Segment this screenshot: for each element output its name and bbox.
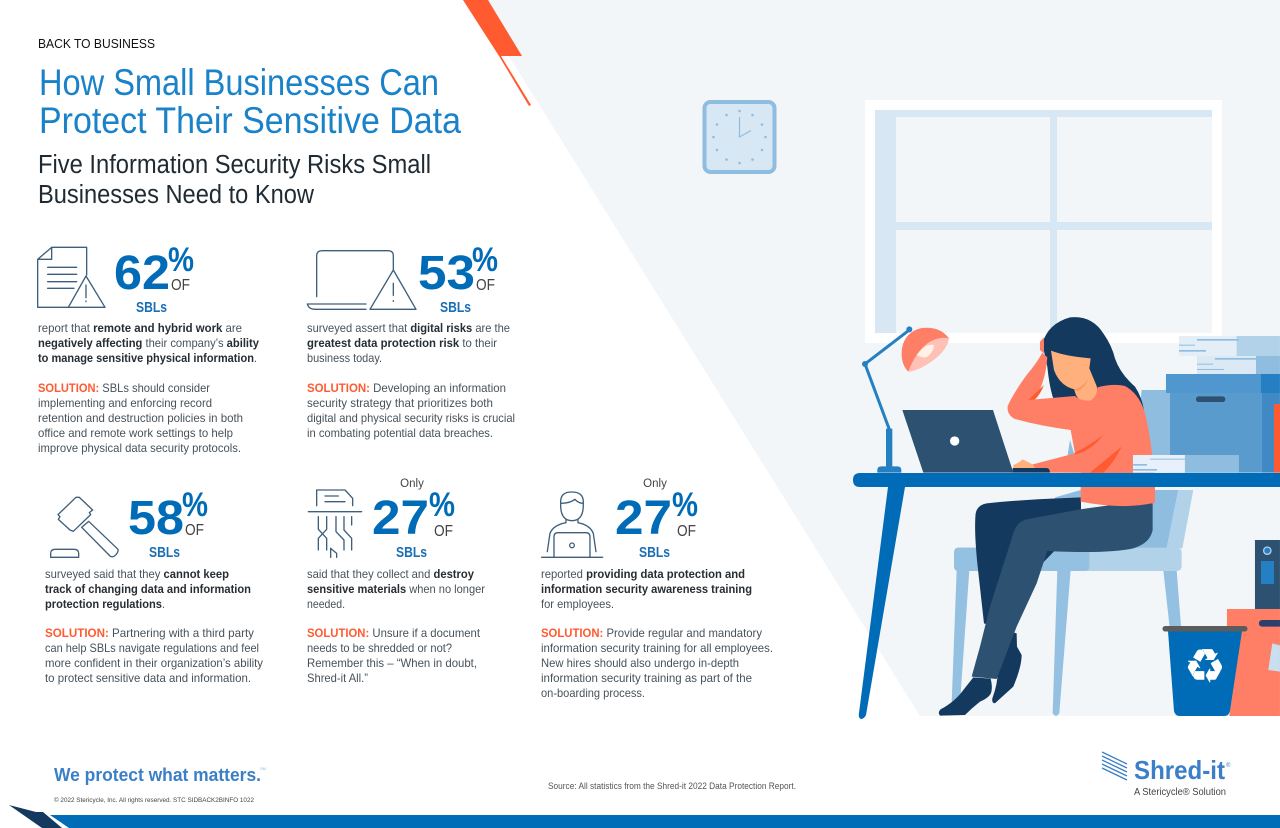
subtitle: Businesses Need to Know xyxy=(38,181,315,209)
stat figure xyxy=(128,486,208,561)
stat figure: Only xyxy=(400,478,424,490)
solution text: improve physical data security protocols. xyxy=(38,441,241,455)
solution text: digital and physical security risks is crucial xyxy=(307,411,515,425)
window xyxy=(865,100,1222,343)
solution text: more confident in their organization’s ability xyxy=(45,656,263,670)
finding text: to manage sensitive physical information. xyxy=(38,351,257,365)
solution text xyxy=(307,626,481,685)
stat figure xyxy=(615,478,698,561)
stat figure: % xyxy=(472,241,498,279)
logo: Shred-it: Shred-it xyxy=(1134,755,1225,785)
icon: laptop with warning xyxy=(307,251,416,309)
title xyxy=(39,62,461,141)
finding text xyxy=(38,321,259,365)
panel: stat 27% destroy xyxy=(307,478,485,685)
icon: recycling bin: ♻ xyxy=(1184,639,1226,693)
icon: document with warning xyxy=(38,247,105,307)
solution text: retention and destruction policies in both xyxy=(38,411,243,425)
solution text: SOLUTION: Partnering with a third party xyxy=(45,626,254,640)
header block xyxy=(38,36,461,209)
solution text xyxy=(541,626,773,700)
solution text: SOLUTION: Developing an information xyxy=(307,381,506,395)
finding text: surveyed said that they cannot keep xyxy=(45,567,229,581)
illustration: chair xyxy=(952,490,1193,716)
finding text: track of changing data and information xyxy=(45,582,251,596)
title: Protect Their Sensitive Data xyxy=(39,100,461,141)
icon: recycling bin xyxy=(1162,626,1248,716)
solution text: needs to be shredded or not? xyxy=(307,641,452,655)
logo: Shred-it xyxy=(1102,752,1231,798)
illustration: desk xyxy=(853,473,1280,719)
finding text: protection regulations. xyxy=(45,597,165,611)
solution text: information security training for all employees. xyxy=(541,641,773,655)
background panel xyxy=(474,0,1280,716)
stat figure: 58 xyxy=(128,492,184,545)
solution text xyxy=(38,381,243,455)
stat figure: 62 xyxy=(114,247,170,300)
solution text: in combating potential data breaches. xyxy=(307,426,493,440)
stat figure: SBLs xyxy=(396,545,427,561)
illustration: laptop xyxy=(902,410,1050,473)
footer tagline: We protect what matters. xyxy=(54,765,261,785)
illustration: desk lamp xyxy=(862,326,949,473)
finding text xyxy=(541,567,752,611)
icon: gavel xyxy=(51,497,118,557)
stat figure: % xyxy=(168,241,194,279)
panel: stat 53% xyxy=(307,241,515,440)
stat figure xyxy=(372,478,455,561)
finding text: sensitive materials when no longer xyxy=(307,582,485,596)
finding text: for employees. xyxy=(541,597,614,611)
solution text: security strategy that prioritizes both xyxy=(307,396,493,410)
illustration: woman xyxy=(939,317,1155,716)
stat figure: SBLs xyxy=(149,545,180,561)
orange accent xyxy=(463,0,531,106)
stat figure: 27 xyxy=(372,492,429,545)
icon: shredder xyxy=(308,490,362,557)
solution text: on-boarding process. xyxy=(541,686,645,700)
panel: stat 62% xyxy=(38,241,259,455)
logo: Shred-it: ® xyxy=(1226,762,1231,769)
finding text: business today. xyxy=(307,351,382,365)
legs xyxy=(939,497,1153,716)
stat figure: % xyxy=(672,486,698,524)
illustration: floor box and tower xyxy=(1227,540,1280,716)
subtitle xyxy=(38,151,431,209)
illustration: storage boxes xyxy=(1166,336,1280,473)
title: How Small Businesses Can xyxy=(39,62,439,103)
panel: stat 58% xyxy=(45,486,263,685)
footer tagline: SM xyxy=(260,766,266,771)
stat figure: % xyxy=(429,486,455,524)
solution text: New hires should also undergo in-depth xyxy=(541,656,739,670)
footer bar xyxy=(9,805,1280,828)
finding text: reported providing data protection and xyxy=(541,567,745,581)
solution text: information security training as part of the xyxy=(541,671,752,685)
stat figure: OF xyxy=(185,522,204,539)
finding text xyxy=(307,321,510,365)
finding text: said that they collect and destroy xyxy=(307,567,474,581)
stat figure: 27 xyxy=(615,492,672,545)
finding text: surveyed assert that digital risks are the xyxy=(307,321,510,335)
solution text: SOLUTION: SBLs should consider xyxy=(38,381,210,395)
eyebrow: BACK TO BUSINESS xyxy=(38,36,155,51)
logo: Shred-it: A Stericycle® Solution xyxy=(1134,787,1226,798)
finding text: information security awareness training xyxy=(541,582,752,596)
panel: stat 27% training xyxy=(541,478,773,700)
solution text: Remember this – “When in doubt, xyxy=(307,656,477,670)
finding text xyxy=(45,567,251,611)
stat figure: SBLs xyxy=(639,545,670,561)
icon: wall clock xyxy=(704,102,774,172)
illustration: chair back upper xyxy=(1065,390,1170,473)
source note: Source: All statistics from the Shred-it 2022 Data Protection Report. xyxy=(548,781,796,791)
solution text: Shred-it All.” xyxy=(307,671,368,685)
copyright: © 2022 Stericycle, Inc. All rights reserved. STC SIDBACK2BINFO 1022 xyxy=(54,797,255,804)
finding text: greatest data protection risk to their xyxy=(307,336,497,350)
finding text: report that remote and hybrid work are xyxy=(38,321,242,335)
solution text: SOLUTION: Unsure if a document xyxy=(307,626,481,640)
stat figure: OF xyxy=(171,277,190,294)
stat figure: SBLs xyxy=(440,300,471,316)
stat figure xyxy=(114,241,194,316)
solution text xyxy=(307,381,515,440)
solution text: office and remote work settings to help xyxy=(38,426,233,440)
icon: person at laptop xyxy=(542,492,603,557)
stat figure: Only xyxy=(643,478,667,490)
solution text: can help SBLs navigate regulations and feel xyxy=(45,641,259,655)
solution text: SOLUTION: Provide regular and mandatory xyxy=(541,626,762,640)
illustration: papers on desk xyxy=(1133,455,1239,473)
finding text: negatively affecting their company’s ability xyxy=(38,336,259,350)
stat figure: 53 xyxy=(418,247,475,300)
subtitle: Five Information Security Risks Small xyxy=(38,151,431,179)
finding text xyxy=(307,567,485,611)
torso, head and arm xyxy=(1008,317,1155,506)
finding text: needed. xyxy=(307,597,345,611)
stat figure: OF xyxy=(476,277,495,294)
solution text: implementing and enforcing record xyxy=(38,396,212,410)
stat figure: OF xyxy=(677,523,696,540)
solution text: to protect sensitive data and information. xyxy=(45,671,251,685)
stat figure xyxy=(418,241,498,316)
solution text xyxy=(45,626,263,685)
stat figure: % xyxy=(182,486,208,524)
stat figure: OF xyxy=(434,523,453,540)
stat figure: SBLs xyxy=(136,300,167,316)
